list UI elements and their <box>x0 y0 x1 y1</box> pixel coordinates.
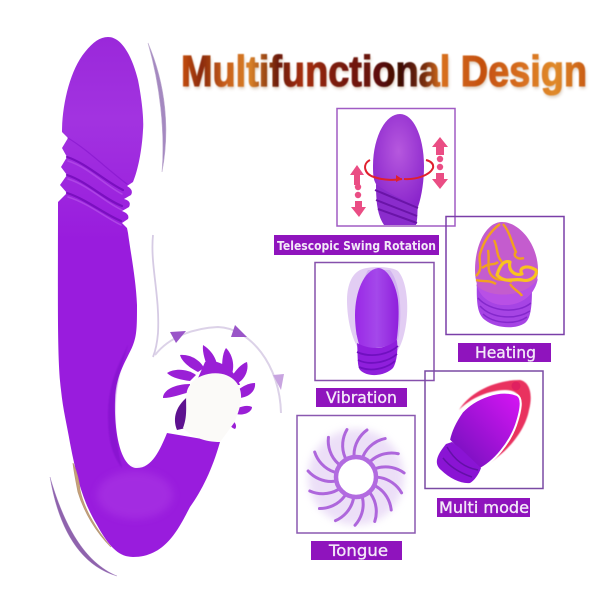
rotation arc with arrows <box>155 325 284 413</box>
label: telescopic swing rotation: Telescopic Swing Rotation <box>277 238 436 253</box>
icon: pink pulse glow <box>459 380 531 465</box>
label: vibration: Vibration <box>326 388 397 407</box>
panel frames <box>297 108 564 533</box>
icon: ridged base <box>437 442 481 483</box>
ridges <box>67 138 127 225</box>
icon: tilted head <box>449 393 521 470</box>
body lower highlight <box>97 471 173 519</box>
device body <box>58 37 220 557</box>
motion arc: bottom left <box>50 477 117 576</box>
label: tongue: Tongue <box>328 541 388 560</box>
icon: up/down arrows right <box>432 137 448 189</box>
icon: vibrating ghosts <box>347 267 407 351</box>
panel: heating <box>475 222 538 327</box>
body side shadow <box>108 345 128 468</box>
motion arc: side <box>152 235 158 357</box>
panel: multi mode <box>437 380 531 483</box>
label: heating: Heating <box>475 343 536 362</box>
panel: vibration <box>347 267 407 375</box>
main product illustration <box>50 37 284 576</box>
icon: ridged base <box>357 340 397 375</box>
label: multi mode: Multi mode <box>439 498 529 517</box>
panel: telescopic swing rotation <box>350 114 448 225</box>
gold base strip <box>73 463 111 547</box>
icon: vibrating egg <box>355 268 399 350</box>
icon: ridged base <box>477 280 532 327</box>
icon: tongue wheel <box>308 429 404 525</box>
label: tongue <box>311 541 402 560</box>
white tip <box>183 373 241 442</box>
icon: up/down arrows left <box>350 165 366 217</box>
label: heating <box>458 343 551 362</box>
label: telescopic swing rotation <box>274 235 439 255</box>
icon: flaming egg <box>475 222 538 305</box>
rotating tongue wheel <box>163 345 255 430</box>
icon: egg head with rotation <box>365 114 433 225</box>
motion arc: top right <box>148 43 166 172</box>
panel: tongue <box>308 429 404 525</box>
